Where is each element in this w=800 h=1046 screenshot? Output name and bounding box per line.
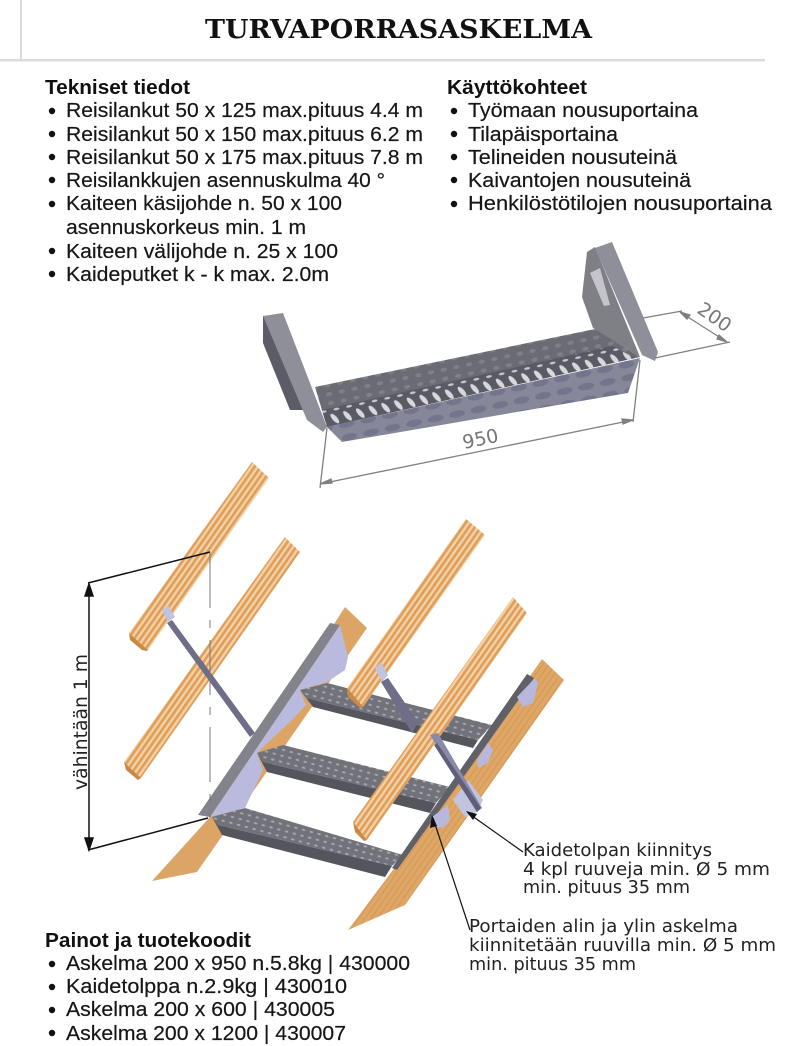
list: uses: Työmaan nousuportaina bbox=[468, 99, 699, 122]
dimension 200: 200 bbox=[693, 298, 735, 337]
list: weights: Askelma 200 x 600 | 430005 bbox=[66, 998, 335, 1021]
dimension 200 bbox=[643, 298, 735, 358]
text: step fixing bbox=[469, 916, 776, 975]
leader arrow: step fixing bbox=[430, 815, 470, 930]
left wood stringer bbox=[152, 607, 367, 881]
height label: vähintään 1 m bbox=[70, 654, 92, 790]
list: technical data: Kaiteen käsijohde n. 50 x 100 bbox=[66, 192, 342, 215]
leader arrow: post fixing bbox=[466, 811, 523, 852]
dimension 950: 950 bbox=[460, 425, 501, 454]
list: uses: Tilapäisportaina bbox=[468, 123, 619, 146]
list: technical data: Kaiteen välijohde n. 25 x 100 bbox=[66, 240, 338, 263]
list: weights: Askelma 200 x 950 n.5.8kg | 430000 bbox=[66, 952, 410, 975]
list: uses: Kaivantojen nousuteinä bbox=[468, 169, 692, 192]
list: uses: Henkilöstötilojen nousuportaina bbox=[468, 192, 773, 215]
tread surface bbox=[315, 329, 640, 427]
list: weights: Kaidetolppa n.2.9kg | 430010 bbox=[66, 975, 347, 998]
list: technical data bbox=[49, 99, 423, 286]
heading: uses: Käyttökohteet bbox=[447, 76, 587, 99]
list: weights: Askelma 200 x 1200 | 430007 bbox=[66, 1022, 346, 1045]
tray front bbox=[327, 358, 640, 442]
step 1 bbox=[300, 683, 492, 748]
rail 3 bbox=[347, 519, 485, 708]
step 2 bbox=[257, 745, 450, 813]
post 2 upper bbox=[375, 662, 418, 733]
left metal stringer bbox=[198, 623, 348, 817]
list: uses bbox=[451, 99, 773, 215]
rail 4 bbox=[353, 597, 527, 841]
list: technical data: Reisilankkujen asennuskulma 40 ° bbox=[66, 169, 385, 192]
list: technical data: Kaideputket k - k max. 2.0m bbox=[66, 263, 329, 286]
list: technical data: Reisilankut 50 x 150 max.pituus 6.2 m bbox=[66, 123, 423, 146]
frame lines bbox=[0, 0, 765, 62]
heading: technical data: Tekniset tiedot bbox=[45, 76, 190, 99]
callout: post fixing bbox=[466, 811, 770, 898]
text: post fixing: Kaidetolpan kiinnitys bbox=[523, 840, 712, 861]
rail 1 bbox=[129, 462, 269, 651]
left bracket side bbox=[263, 316, 303, 410]
callout: step fixing bbox=[430, 815, 776, 975]
dimension 950 bbox=[320, 360, 640, 488]
text: step fixing: min. pituus 35 mm bbox=[469, 954, 636, 975]
rail 2 bbox=[124, 537, 300, 780]
right wood stringer bbox=[348, 659, 564, 930]
panel: uses bbox=[447, 76, 773, 215]
right bracket face bbox=[595, 242, 658, 361]
text: post fixing: 4 kpl ruuveja min. Ø 5 mm bbox=[523, 859, 770, 880]
list: technical data: Reisilankut 50 x 125 max.pituus 4.4 m bbox=[66, 99, 423, 122]
right bracket side bbox=[582, 247, 640, 357]
left bracket face bbox=[263, 313, 327, 432]
list: uses: Telineiden nousuteinä bbox=[468, 146, 678, 169]
text: step fixing: kiinnitetään ruuvilla min. Ø 5 mm bbox=[469, 935, 776, 956]
tread grip band bbox=[322, 346, 635, 427]
text: post fixing bbox=[523, 840, 770, 898]
heading: weights: Painot ja tuotekoodit bbox=[45, 929, 251, 952]
illustration: single stair step with dimensions bbox=[263, 242, 735, 488]
text: post fixing: min. pituus 35 mm bbox=[523, 877, 690, 898]
list: technical data: Reisilankut 50 x 175 max.pituus 7.8 m bbox=[66, 146, 423, 169]
list: technical data: asennuskorkeus min. 1 m bbox=[66, 216, 306, 239]
title: TURVAPORRASASKELMA bbox=[205, 15, 593, 45]
illustration: stair assembly bbox=[70, 462, 564, 930]
list: weights bbox=[49, 952, 410, 1045]
post 2 lower bbox=[430, 733, 483, 817]
panel: weights and product codes bbox=[45, 929, 410, 1045]
post 1 bbox=[162, 605, 255, 737]
panel: technical data bbox=[45, 76, 423, 286]
text: step fixing: Portaiden alin ja ylin askelma bbox=[469, 916, 738, 937]
height dimension bbox=[85, 552, 210, 850]
right bracket slot bbox=[590, 268, 610, 306]
step 3 bbox=[212, 808, 403, 877]
right metal stringer bbox=[392, 674, 538, 870]
